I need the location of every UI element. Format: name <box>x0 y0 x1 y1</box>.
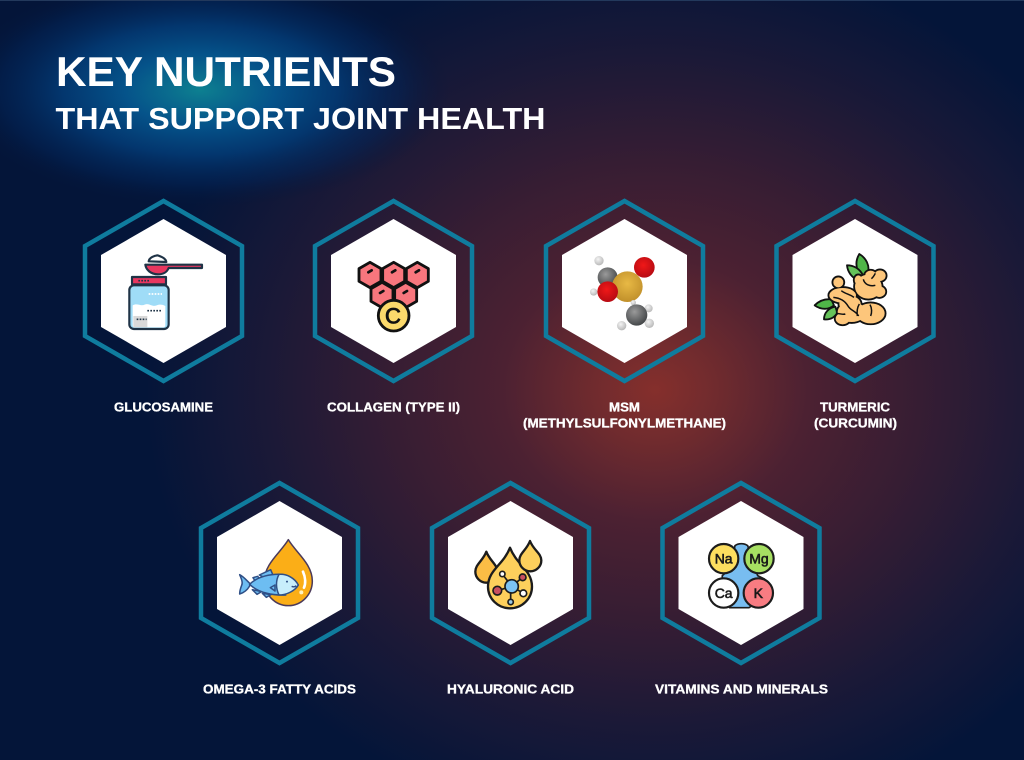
label: COLLAGEN (TYPE II) <box>327 400 460 414</box>
title <box>56 48 546 136</box>
icon: turmeric root <box>815 254 886 324</box>
panel: glucosamine <box>85 201 242 414</box>
hexagon frame <box>662 483 820 663</box>
hexagon frame <box>432 483 589 663</box>
label: OMEGA-3 FATTY ACIDS <box>203 682 356 696</box>
heading: key nutrients: KEY NUTRIENTS <box>56 48 396 95</box>
panel: vitamins and minerals <box>655 483 828 696</box>
panel: msm <box>523 201 726 430</box>
icon: mineral circles <box>709 544 774 608</box>
hexagon frame <box>201 483 358 663</box>
icon: collagen hexagons <box>359 262 428 331</box>
panel: omega-3 <box>201 483 358 696</box>
label: GLUCOSAMINE <box>114 400 213 414</box>
icon: mineral circles: Mg <box>749 551 769 567</box>
hexagon frame <box>315 201 472 381</box>
panel: collagen <box>315 201 472 414</box>
panel: turmeric <box>776 201 934 430</box>
icon: mineral circles: Ca <box>715 585 733 601</box>
icon: MSM molecule <box>590 256 655 330</box>
icon: fish and oil drop <box>240 540 312 606</box>
hexagon frame <box>546 201 703 381</box>
label line 2: (CURCUMIN) <box>814 416 897 430</box>
icon: mineral circles: K <box>754 585 764 601</box>
icon: powder jar and scoop <box>129 255 202 329</box>
hexagon frame <box>85 201 242 381</box>
icon: collagen hexagons: C <box>385 303 401 328</box>
panel: hyaluronic acid <box>432 483 589 696</box>
label: VITAMINS AND MINERALS <box>655 682 828 696</box>
icon: hyaluronic acid drops <box>475 541 541 608</box>
hexagon frame <box>776 201 934 381</box>
subheading: that support joint health: THAT SUPPORT JOINT HEALTH <box>56 101 546 136</box>
label line 2: (METHYLSULFONYLMETHANE) <box>523 416 726 430</box>
label: HYALURONIC ACID <box>447 682 574 696</box>
label: MSM <box>609 400 640 414</box>
label: TURMERIC <box>820 400 890 414</box>
icon: mineral circles: Na <box>715 551 733 567</box>
